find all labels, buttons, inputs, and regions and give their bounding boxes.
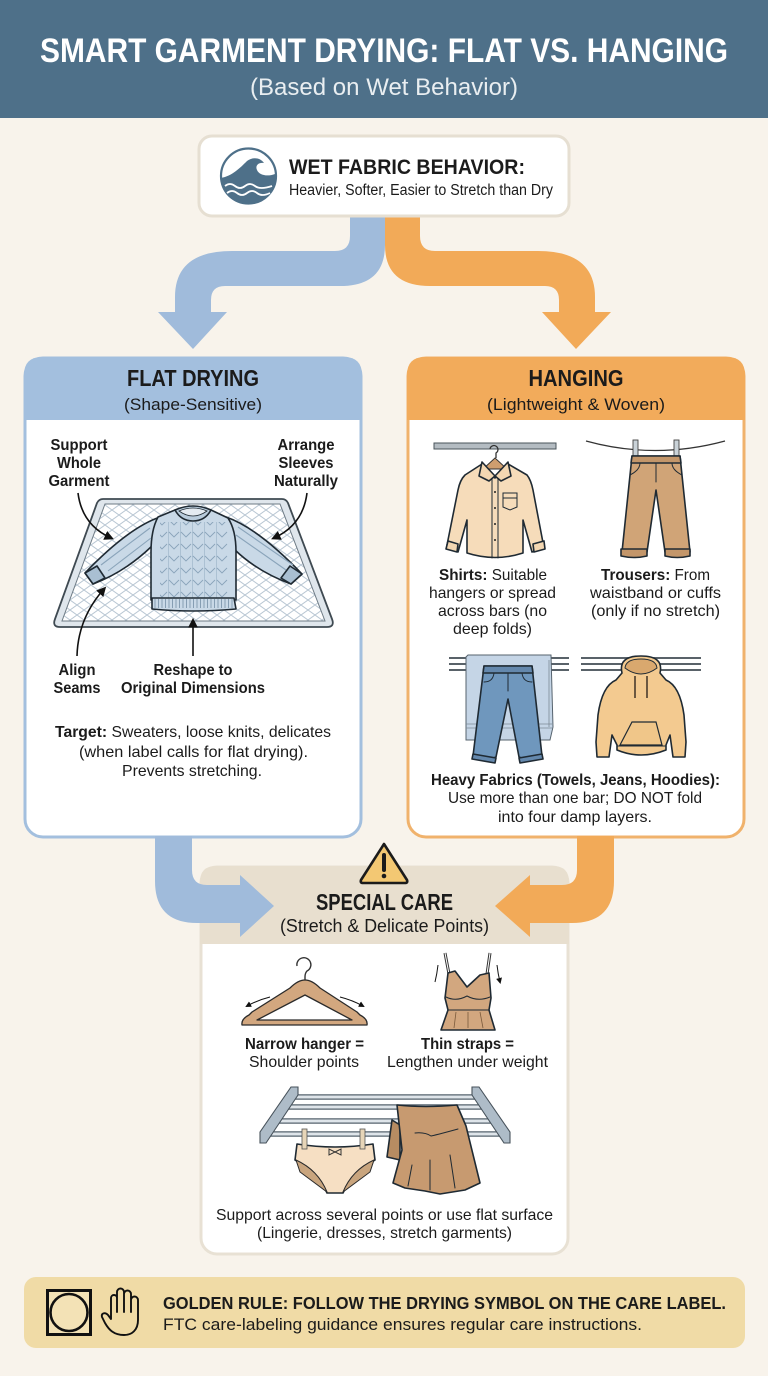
arrow: blue to special care xyxy=(155,836,274,937)
label: align seams: Align xyxy=(58,662,96,679)
text: target: (when label calls for flat drying). xyxy=(79,744,308,761)
illustration: drying mat xyxy=(54,499,333,627)
text: shirts: Shirts: Suitable xyxy=(439,567,547,584)
text: narrow hanger: Shoulder points xyxy=(249,1054,359,1071)
arrow: to support xyxy=(78,493,111,538)
label: support whole garment: Support xyxy=(50,437,108,454)
icon: dry symbol xyxy=(48,1290,90,1334)
text: shirts: deep folds) xyxy=(453,621,532,638)
icon: wave xyxy=(221,148,276,204)
subheading: (Lightweight & Woven) xyxy=(487,395,665,414)
text: heavy fabrics xyxy=(431,772,720,826)
header banner xyxy=(0,0,768,118)
banner: golden rule xyxy=(24,1277,745,1348)
text: trousers xyxy=(589,567,721,620)
arrow: blue to flat drying xyxy=(158,214,385,349)
text: trousers: waistband or cuffs xyxy=(589,585,721,602)
arrow: to seams xyxy=(77,589,104,656)
icon: strappy dress xyxy=(435,953,500,1030)
subheading: (Shape-Sensitive) xyxy=(124,395,262,414)
arrow: to hem xyxy=(192,621,194,656)
label: reshape xyxy=(121,662,265,697)
label: arrange sleeves naturally xyxy=(274,437,338,490)
text: shirts: hangers or spread xyxy=(429,585,556,602)
text: shirts xyxy=(429,567,556,638)
heading: GOLDEN RULE: FOLLOW THE DRYING SYMBOL ON THE CARE LABEL. xyxy=(163,1293,726,1313)
icon: draped dress xyxy=(387,1105,480,1194)
illustration: sweater xyxy=(85,506,302,611)
illustration: hoodie xyxy=(581,656,701,757)
text: target: Target: Sweaters, loose knits, delicates xyxy=(55,724,331,741)
icon: hanger xyxy=(242,958,367,1025)
label: align seams xyxy=(54,662,101,697)
text: support note: Support across several points or use flat surface xyxy=(216,1207,553,1224)
label: arrange sleeves naturally: Arrange xyxy=(278,437,335,454)
illustration: trousers on line xyxy=(586,440,725,558)
text: target: Prevents stretching. xyxy=(122,763,262,780)
subheading: (Stretch & Delicate Points) xyxy=(280,916,489,936)
icon: hand xyxy=(102,1289,138,1335)
label: arrange sleeves naturally: Naturally xyxy=(274,473,338,490)
illustration: drying rack xyxy=(260,1087,510,1194)
subtitle: (Based on Wet Behavior) xyxy=(250,74,518,101)
label: reshape: Reshape to xyxy=(154,662,233,679)
label: reshape: Original Dimensions xyxy=(121,680,265,697)
heading: SPECIAL CARE xyxy=(316,889,453,915)
icon: warning xyxy=(361,844,407,883)
label: arrange sleeves naturally: Sleeves xyxy=(278,455,334,472)
text: FTC care-labeling guidance ensures regular care instructions. xyxy=(163,1315,642,1334)
icon: underwear xyxy=(295,1129,375,1193)
arrow: to sleeves xyxy=(274,493,307,538)
label: align seams: Seams xyxy=(54,680,101,697)
label: support whole garment: Whole xyxy=(57,455,101,472)
text: Heavier, Softer, Easier to Stretch than Dry xyxy=(289,182,553,199)
text: trousers: Trousers: From xyxy=(601,567,710,584)
text: target xyxy=(55,724,331,780)
text: narrow hanger: Narrow hanger = xyxy=(245,1036,364,1053)
text: narrow hanger xyxy=(245,1036,364,1071)
illustration: shirt on hanger xyxy=(434,443,556,558)
text: thin straps: Lengthen under weight xyxy=(387,1054,549,1071)
label: support whole garment: Garment xyxy=(48,473,110,490)
text: support note: (Lingerie, dresses, stretch garments) xyxy=(257,1225,512,1242)
text: heavy fabrics: into four damp layers. xyxy=(498,809,652,826)
label: support whole garment xyxy=(48,437,110,490)
arrow: orange to hanging xyxy=(385,214,611,349)
text: thin straps: Thin straps = xyxy=(421,1036,514,1053)
panel: hanging xyxy=(407,357,745,837)
text: thin straps xyxy=(387,1036,549,1071)
text: heavy fabrics: Heavy Fabrics (Towels, Jeans, Hoodies): xyxy=(431,772,720,789)
text: heavy fabrics: Use more than one bar; DO NOT fold xyxy=(448,790,702,807)
panel: wet fabric behavior xyxy=(199,136,569,216)
panel: special care xyxy=(200,866,569,1254)
heading: HANGING xyxy=(528,365,624,391)
text: support note xyxy=(216,1207,553,1242)
text: shirts: across bars (no xyxy=(438,603,547,620)
heading: FLAT DRYING xyxy=(127,365,259,391)
illustration: towel and jeans xyxy=(449,655,569,763)
heading: WET FABRIC BEHAVIOR: xyxy=(289,156,525,179)
arrow: orange to special care xyxy=(495,836,614,937)
text: trousers: (only if no stretch) xyxy=(591,603,720,620)
panel: flat drying xyxy=(24,357,362,837)
